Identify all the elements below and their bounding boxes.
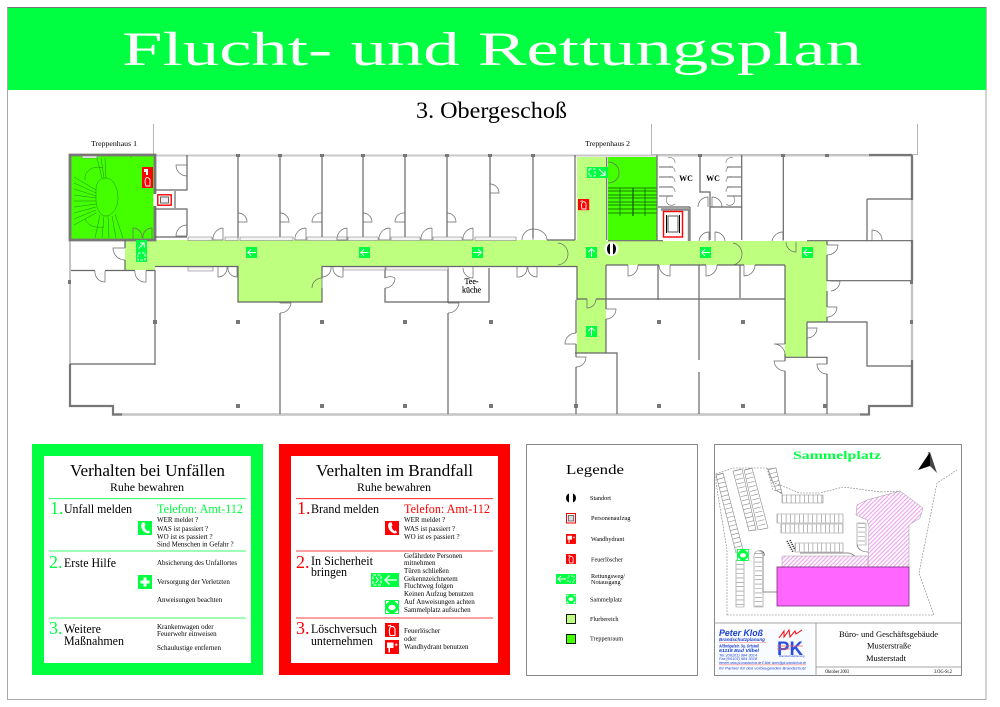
step 1: WAS ist passiert ? bbox=[404, 525, 455, 533]
legend: Standort bbox=[566, 494, 611, 502]
room label: WC right: WC bbox=[706, 174, 720, 183]
room label: Teeküche: küche bbox=[462, 286, 481, 295]
step 2: 2. bbox=[296, 552, 310, 572]
access road bbox=[759, 545, 868, 592]
building info: Musterstadt bbox=[866, 653, 907, 663]
label: Treppenhaus 2: Treppenhaus 2 bbox=[585, 139, 630, 148]
step 3: 3. bbox=[296, 618, 310, 638]
company logo: Altbrögelstr. 3a, Ortsteil bbox=[718, 644, 760, 648]
legend: Personenaufzug bbox=[566, 514, 631, 523]
inner walls bbox=[70, 155, 577, 414]
legend: Feuerlöscher bbox=[566, 554, 623, 564]
company logo: Internet: www.pk-brandschutz.de E-Mail: buero@pk-brandschutz.de bbox=[719, 661, 806, 665]
company logo: Tel.:(06101) 984 3014 bbox=[719, 652, 758, 658]
step 3: Wandhydrant benutzen bbox=[404, 643, 469, 651]
step 1: 1. bbox=[50, 498, 64, 518]
step 2: Sammelplatz aufsuchen bbox=[404, 606, 471, 614]
legend: Standort: Standort bbox=[590, 495, 611, 502]
step 2: Fluchtweg folgen bbox=[404, 582, 454, 590]
step 1: WO ist es passiert ? bbox=[404, 533, 460, 541]
panel: accidents bbox=[32, 444, 263, 675]
corridor glazing bbox=[188, 237, 516, 271]
step 2: Keinen Aufzug benutzen bbox=[404, 590, 474, 598]
step 2: Gefährdete Personen bbox=[404, 552, 463, 560]
panel: site plan bbox=[714, 444, 962, 676]
heading: Verhalten bei Unfällen bbox=[70, 461, 225, 480]
step 1: WER meldet ? bbox=[404, 516, 445, 524]
step 3: Löschversuch bbox=[311, 621, 377, 636]
step 3: Krankenwagen oder bbox=[157, 623, 214, 631]
title banner: Flucht- und Rettungsplan bbox=[122, 23, 862, 76]
step 1: Unfall melden bbox=[64, 501, 132, 516]
subheading: Ruhe bewahren bbox=[110, 482, 184, 494]
company logo bbox=[717, 628, 812, 675]
step 1: 1. bbox=[297, 498, 310, 518]
legend: Flurbereich bbox=[566, 614, 619, 624]
company logo: 61118 Bad Vilbel bbox=[719, 648, 760, 653]
building info: 3.OG-St.2 bbox=[934, 670, 952, 675]
step 1 bbox=[50, 498, 243, 548]
property boundary bbox=[716, 468, 957, 615]
step 3 bbox=[49, 618, 221, 652]
step 2 bbox=[296, 552, 475, 614]
room label: Teeküche: Tee- bbox=[464, 277, 479, 286]
site plan title: Sammelplatz bbox=[793, 448, 882, 462]
outer walls bbox=[155, 154, 912, 156]
step 1: Sind Menschen in Gefahr ? bbox=[157, 540, 234, 548]
legend title: Legende bbox=[566, 462, 624, 477]
section rules bbox=[296, 499, 493, 618]
floor heading: 3. Obergeschoß bbox=[416, 98, 567, 123]
subheading: Ruhe bewahren bbox=[357, 482, 431, 494]
stairwell 2 bbox=[608, 157, 657, 240]
step 2: mitnehmen bbox=[404, 559, 436, 567]
step 1: WER meldet ? bbox=[157, 516, 198, 524]
extinguisher sign bbox=[578, 199, 589, 210]
step 3: Maßnahmen bbox=[64, 633, 124, 648]
legend: Treppenraum: Treppenraum bbox=[590, 636, 623, 642]
step 2: Türen schließen bbox=[404, 567, 449, 575]
step 1: Telefon: Amt-112 bbox=[157, 501, 243, 516]
company logo: Brandschutzplanung bbox=[779, 654, 805, 658]
legend: Sammelplatz: Sammelplatz bbox=[590, 596, 623, 604]
legend: Sammelplatz bbox=[566, 594, 623, 604]
site assembly point icon bbox=[737, 549, 749, 561]
heading: Verhalten im Brandfall bbox=[316, 461, 473, 480]
exit arrows bbox=[246, 247, 813, 337]
step 1: Telefon: Amt-112 bbox=[404, 501, 490, 516]
parking rows bbox=[716, 468, 866, 607]
step 2: Versorgung der Verletzten bbox=[157, 578, 230, 586]
company logo: Ihr Partner für den vorbeugenden Brandschutz bbox=[719, 666, 806, 670]
step 2 bbox=[49, 552, 237, 604]
step 1: WAS ist passiert ? bbox=[157, 525, 208, 533]
label: Treppenhaus 1: Treppenhaus 1 bbox=[91, 139, 137, 148]
step 2: Gekennzeichnetem bbox=[404, 575, 458, 583]
step 3: Schaulustige entfernen bbox=[157, 644, 221, 652]
step 1: WO ist es passiert ? bbox=[157, 533, 213, 541]
legend: Rettungsweg: Notausgang bbox=[591, 579, 621, 586]
legend: Wandhydrant: Wandhydrant bbox=[591, 536, 624, 543]
step 3: unternehmen bbox=[311, 633, 373, 648]
building info: Büro- und Geschäftsgebäude bbox=[839, 629, 938, 639]
north arrow bbox=[918, 451, 937, 473]
building info: Oktober 2003 bbox=[825, 670, 849, 675]
step 2: Absicherung des Unfallortes bbox=[157, 559, 237, 567]
company logo: Brandschutzplanung bbox=[719, 637, 765, 642]
building info: Musterstraße bbox=[867, 640, 911, 650]
exit sign at Treppenhaus 1 bbox=[136, 240, 147, 262]
company logo: Fax:(06101) 984 3018 bbox=[719, 656, 758, 661]
step 3 bbox=[296, 618, 469, 654]
main building bbox=[777, 567, 909, 606]
north arrow: N bbox=[928, 451, 930, 456]
elevator 1 bbox=[155, 194, 171, 206]
structural columns bbox=[68, 154, 913, 408]
panel: fire bbox=[279, 444, 510, 675]
exit sign at Treppenhaus 2 bbox=[587, 167, 608, 178]
step 2: Erste Hilfe bbox=[64, 555, 116, 570]
doors bbox=[95, 162, 882, 374]
hatched building wing bbox=[782, 491, 923, 567]
floor plan bbox=[68, 124, 918, 414]
legend: Treppenraum bbox=[566, 634, 623, 644]
step 2: 2. bbox=[49, 552, 62, 572]
legend: Rettungsweg: Rettungsweg/ bbox=[591, 573, 625, 580]
bicycle stand bbox=[787, 540, 795, 552]
room label: WC left: WC bbox=[679, 174, 693, 183]
stairwell 1 bbox=[71, 155, 155, 239]
step 1: Brand melden bbox=[311, 501, 379, 516]
corridor area bbox=[125, 157, 827, 357]
step 2: Auf Anweisungen achten bbox=[404, 598, 475, 606]
legend: Flurbereich: Flurbereich bbox=[590, 616, 619, 623]
company logo: PK bbox=[777, 639, 803, 660]
elevator 2 bbox=[664, 212, 682, 237]
location marker bbox=[604, 242, 618, 256]
step 3: oder bbox=[404, 635, 417, 643]
step 3: Weitere bbox=[64, 621, 101, 636]
step 3: Feuerwehr einweisen bbox=[157, 630, 217, 638]
step 2: Anweisungen beachten bbox=[157, 596, 223, 604]
step 3: Feuerlöscher bbox=[404, 627, 441, 635]
step 2: In Sicherheit bbox=[311, 553, 373, 568]
legend: Personenaufzug: Personenaufzug bbox=[591, 515, 631, 522]
step 3: 3. bbox=[49, 618, 62, 638]
upper site lines bbox=[154, 124, 918, 155]
hydrant and extinguisher bbox=[142, 167, 153, 188]
elevator shaft walls bbox=[661, 210, 689, 241]
title banner bbox=[8, 8, 986, 90]
building info bbox=[825, 629, 952, 675]
step 2: bringen bbox=[311, 564, 347, 579]
section rules bbox=[49, 499, 246, 618]
legend: Rettungsweg bbox=[556, 573, 625, 586]
WC partitions bbox=[659, 158, 741, 205]
legend: Wandhydrant bbox=[566, 534, 624, 544]
company logo: Peter Kloß bbox=[719, 628, 763, 639]
step 1 bbox=[297, 498, 490, 541]
panel: legend bbox=[526, 444, 698, 676]
footer rules bbox=[714, 623, 961, 676]
legend: Feuerlöscher: Feuerlöscher bbox=[591, 556, 623, 564]
